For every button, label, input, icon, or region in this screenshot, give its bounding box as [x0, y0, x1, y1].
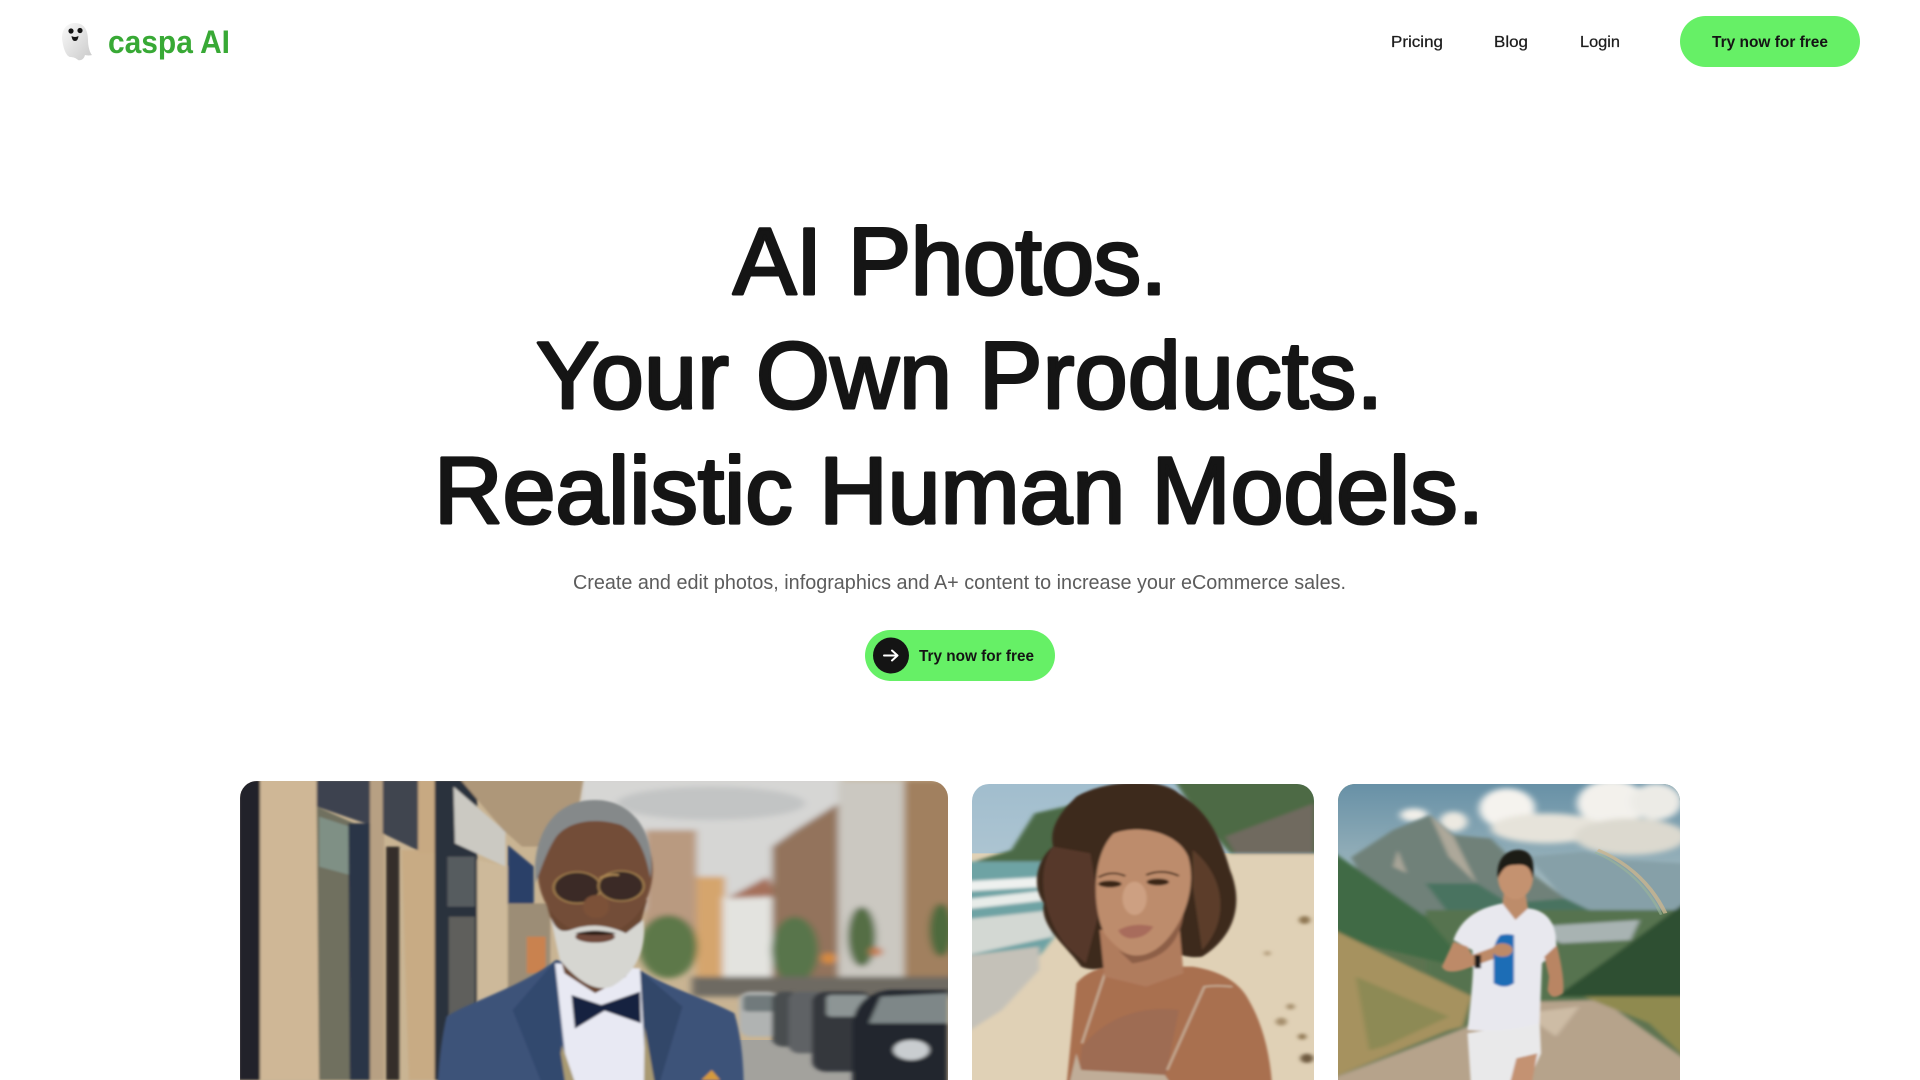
- hero heading: Your Own Products.: [536, 323, 1383, 429]
- nav button: [1680, 16, 1860, 67]
- hero heading: [434, 209, 1484, 544]
- nav link: pricing: Pricing: [1391, 34, 1443, 51]
- call to action button: [865, 630, 1055, 681]
- icon: ghost: [62, 23, 92, 60]
- icon: arrow in circle: [873, 638, 909, 674]
- logo wordmark: caspa AI: [108, 24, 230, 60]
- photo: man running on a mountain trail with a water bottle: [1338, 784, 1680, 1080]
- call to action button: Try now for free: [919, 648, 1034, 665]
- nav button: Try now for free: [1712, 34, 1828, 51]
- logo: [62, 23, 230, 60]
- subtitle: Create and edit photos, infographics and A+ content to increase your eCommerce sales.: [573, 572, 1346, 594]
- hero heading: AI Photos.: [733, 209, 1167, 315]
- photo: older man in navy suit on city street: [240, 781, 948, 1080]
- hero heading: Realistic Human Models.: [434, 438, 1484, 544]
- nav link: blog: Blog: [1494, 34, 1528, 51]
- photo: woman with curly hair on a beach: [972, 784, 1314, 1080]
- navigation: [1391, 16, 1860, 67]
- nav link: login: Login: [1580, 34, 1620, 51]
